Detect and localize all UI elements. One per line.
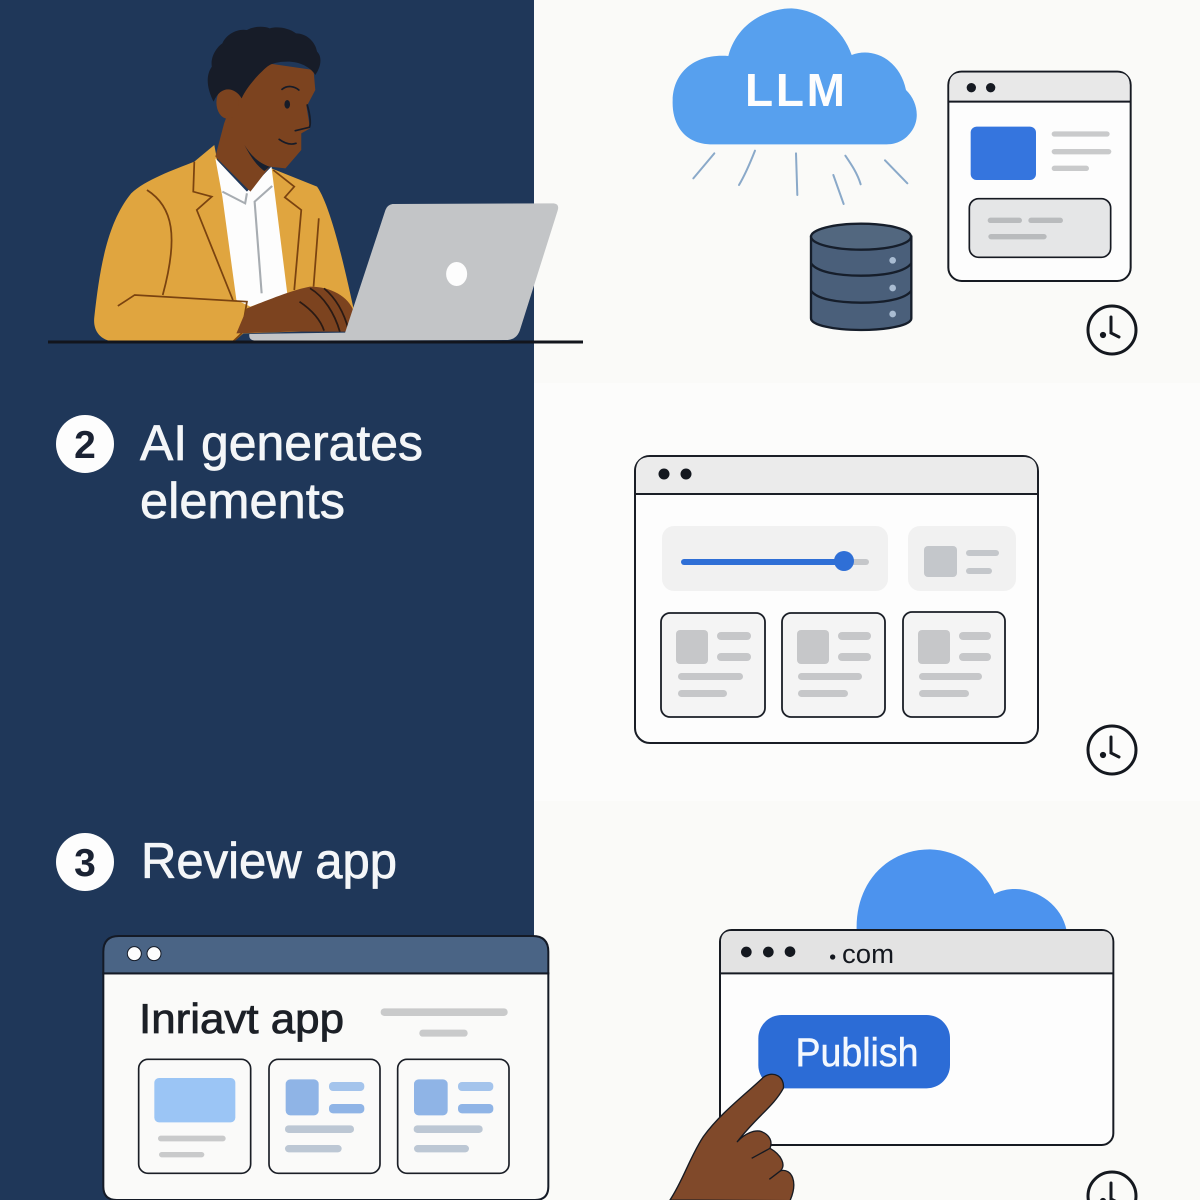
illustration: person at laptop [94, 27, 558, 342]
publish label: Publish [796, 1031, 918, 1075]
cloud [673, 8, 917, 144]
hair [208, 27, 320, 102]
card 1 [661, 613, 765, 717]
desk line [48, 340, 583, 344]
neck and face [215, 63, 315, 192]
facial features [279, 87, 310, 144]
shirt [215, 158, 287, 307]
laptop logo [446, 262, 467, 286]
heading text: Review app [141, 833, 397, 889]
rays [693, 151, 907, 204]
step 3 heading [56, 833, 397, 891]
window dots [741, 946, 835, 960]
icon: clock bottom [1088, 1172, 1136, 1200]
badge 3 [56, 833, 114, 891]
url label: com [842, 939, 894, 969]
shirt collar and placket [222, 186, 272, 293]
card 3 [903, 612, 1005, 717]
ear [216, 87, 239, 119]
icon: clock top [1088, 306, 1136, 354]
app title: Inriavt app [139, 995, 344, 1042]
jacket seams [118, 162, 319, 342]
window frame [720, 930, 1113, 1145]
jacket [94, 145, 354, 342]
window dots [127, 947, 161, 961]
window dots [658, 468, 692, 480]
publish button [758, 1015, 950, 1088]
finger lines [300, 288, 349, 332]
illustration: generated elements window [635, 456, 1038, 743]
app window [948, 72, 1131, 281]
window header [103, 936, 548, 973]
badge 3: 3 [74, 842, 96, 885]
card 3 [398, 1059, 509, 1173]
database [811, 224, 911, 330]
illustration: publish window [670, 849, 1113, 1200]
badge 2 [56, 415, 114, 473]
cloud [857, 849, 1067, 931]
card 2 [782, 613, 885, 717]
card 1 [139, 1059, 251, 1173]
heading text: elements [140, 473, 345, 529]
database lights [889, 257, 896, 317]
illustration: LLM cloud, database and app window [673, 8, 1131, 330]
panel: left navy column [0, 0, 534, 1200]
window header [636, 457, 1037, 494]
slider panel [662, 526, 888, 591]
laptop [249, 203, 558, 341]
badge 2: 2 [74, 424, 96, 467]
jaw shadow [244, 145, 270, 171]
heading text: AI generates [140, 415, 423, 471]
panel: right top background [534, 0, 1200, 383]
window body [103, 973, 548, 1200]
placeholder bars [381, 1008, 508, 1037]
window frame [635, 456, 1038, 743]
panel: right middle background [534, 383, 1200, 801]
LLM label: LLM [745, 64, 845, 116]
illustration: review app window [103, 936, 548, 1200]
step 2 heading [56, 415, 423, 529]
card 2 [269, 1059, 380, 1173]
small panel [908, 526, 1016, 591]
icon: clock middle [1088, 726, 1136, 774]
pointing hand [670, 1074, 794, 1200]
panel: right bottom background [534, 801, 1200, 1200]
hands [236, 287, 354, 333]
window header [721, 931, 1112, 973]
